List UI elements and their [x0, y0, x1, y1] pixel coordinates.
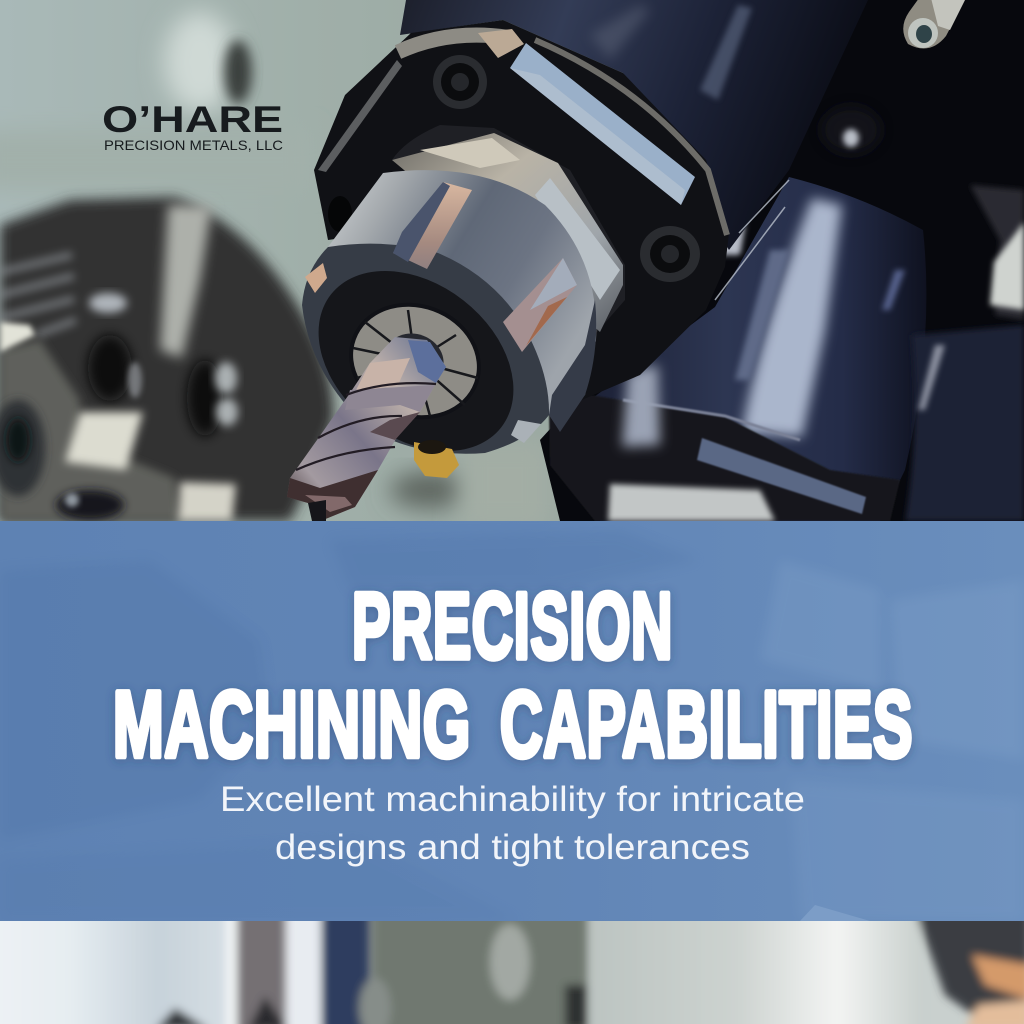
collet nut barrel — [328, 170, 596, 415]
silver hex nut — [392, 133, 623, 332]
screw: top — [433, 55, 487, 109]
blue text band — [0, 521, 1024, 921]
end mill cutter — [287, 337, 446, 521]
blurred background light fixture — [0, 12, 550, 530]
right dark machine body — [540, 0, 1024, 521]
photo strip: bottom — [0, 921, 1024, 1024]
title — [113, 573, 913, 776]
lower ring — [549, 395, 900, 521]
flange silver rim — [398, 35, 512, 52]
copper wrench notches — [305, 182, 577, 443]
photo: CNC milling tool and spindle — [0, 0, 1024, 530]
screw: right — [640, 226, 700, 282]
collet nut front face — [302, 244, 549, 454]
title: PRECISION — [352, 573, 673, 678]
subtitle: designs and tight tolerances — [275, 828, 750, 867]
title: MACHINING — [113, 672, 471, 776]
subtitle — [220, 780, 805, 867]
silver key bar — [510, 43, 695, 205]
right side fitting — [970, 185, 1024, 320]
collet with slots — [353, 306, 477, 416]
logo: O'Hare Precision Metals: O’HARE — [102, 99, 283, 140]
subtitle: Excellent machinability for intricate — [220, 780, 805, 819]
black octagonal flange — [314, 20, 729, 402]
blue cylinder with reflection — [590, 177, 926, 521]
spindle upper body — [400, 0, 868, 300]
right navy cylinder — [905, 325, 1024, 521]
logo: O'Hare Precision Metals: PRECISION METALS, LLC — [104, 137, 283, 153]
screw: left — [328, 196, 352, 232]
gold insert — [414, 440, 459, 478]
blurred chuck jaw — [0, 340, 180, 521]
blurred lathe chuck disc — [0, 197, 333, 521]
silver tube fitting — [903, 0, 968, 48]
logo: O'Hare Precision Metals — [102, 99, 283, 153]
flange recess — [392, 125, 625, 340]
